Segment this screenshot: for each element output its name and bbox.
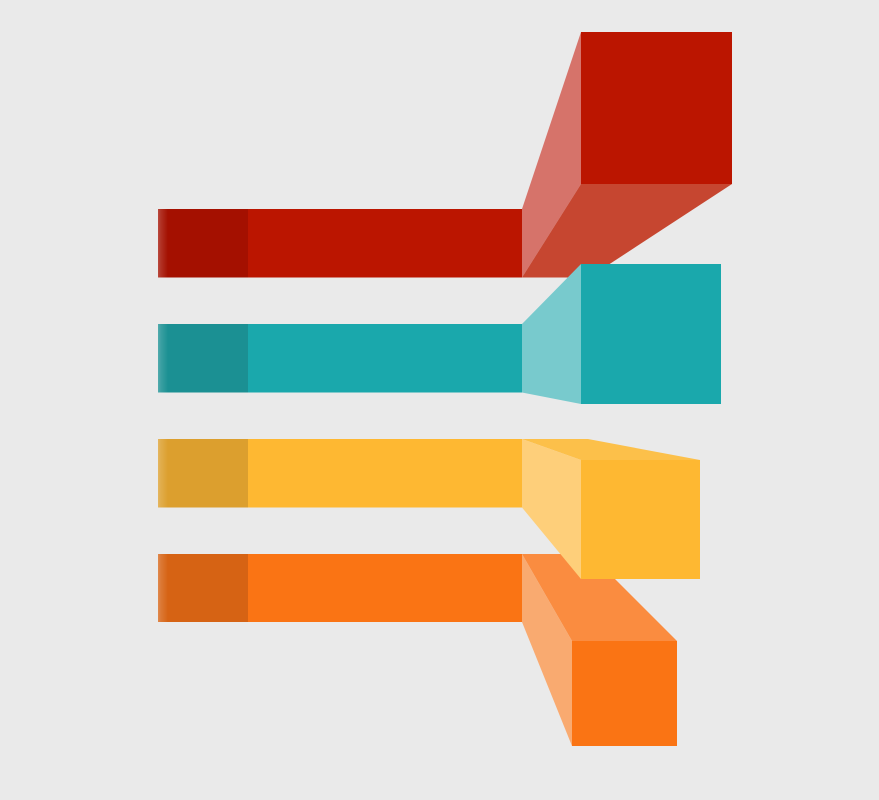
- bar 3: yellow: [158, 439, 700, 579]
- yellow bar dark end: [158, 439, 248, 508]
- red side face: [522, 32, 581, 278]
- red front square: [581, 32, 732, 184]
- orange side face: [522, 554, 572, 746]
- orange bar dark end: [158, 554, 248, 622]
- teal bar dark end: [158, 324, 248, 392]
- orange front square: [572, 641, 677, 746]
- bar 2: teal: [158, 264, 721, 404]
- orange top face: [522, 554, 677, 641]
- bar 4: orange: [158, 554, 677, 746]
- teal side face: [522, 264, 581, 404]
- yellow side face: [522, 439, 581, 579]
- yellow front square: [581, 460, 700, 579]
- orange bar body: [158, 554, 522, 622]
- bar 1: red: [158, 32, 732, 278]
- yellow top face: [522, 439, 700, 460]
- red bar body: [158, 209, 522, 278]
- teal bar body: [158, 324, 522, 392]
- red bar dark end: [158, 209, 248, 278]
- red bottom face: [522, 184, 732, 278]
- yellow bar body: [158, 439, 522, 508]
- teal front square: [581, 264, 721, 404]
